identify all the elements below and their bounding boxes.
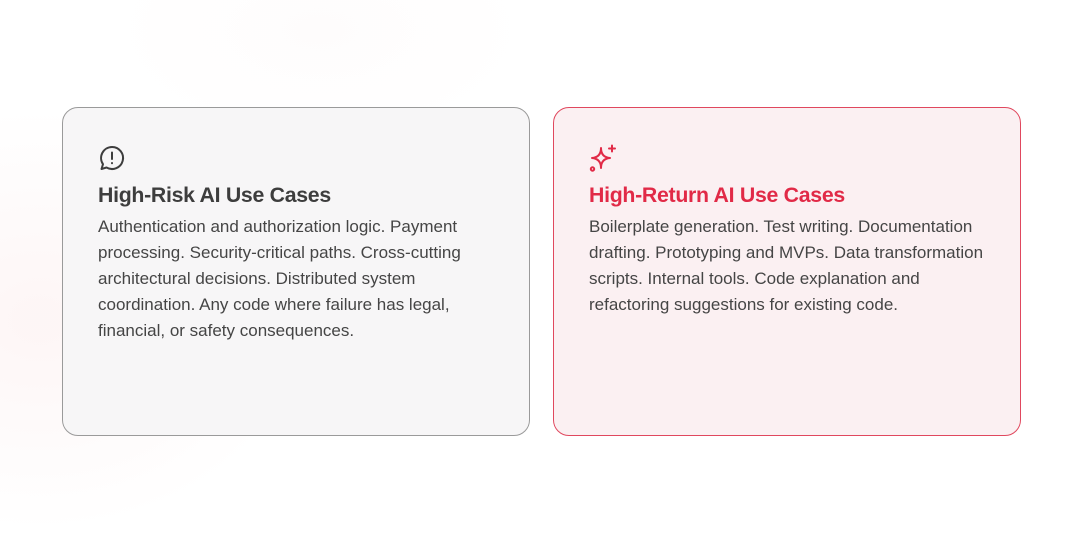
heading: High-Return AI Use Cases (589, 183, 845, 207)
text block: Authentication and authorization logic. Payment processing. Security-critical paths. Cross-cutting architectural decisions. Distributed system coordination. Any code where failure has legal, financial, or safety consequences. (98, 217, 461, 340)
panel: high-return (553, 107, 1021, 436)
icon: sparkle (590, 144, 616, 172)
icon: alert chat bubble (100, 146, 124, 170)
panel: high-risk (62, 107, 530, 436)
heading: High-Risk AI Use Cases (98, 183, 331, 207)
text block: Boilerplate generation. Test writing. Documentation drafting. Prototyping and MVPs. Data transformation scripts. Internal tools. Code explanation and refactoring suggestions for existing code. (589, 217, 983, 314)
